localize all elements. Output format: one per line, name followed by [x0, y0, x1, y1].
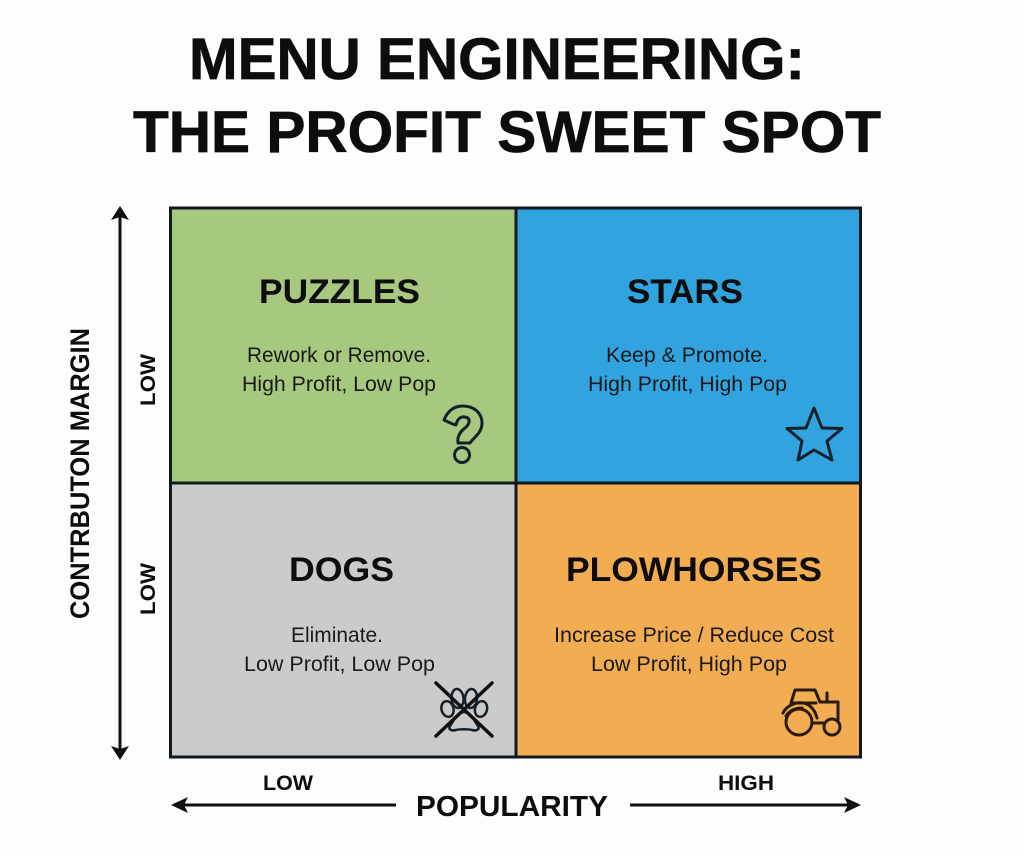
icon: tractor	[783, 690, 840, 735]
text: dogs description	[244, 624, 435, 676]
text: plowhorses description: Low Profit, High Pop	[591, 653, 787, 676]
panel: dogs	[170, 483, 516, 757]
arrow: popularity left	[171, 797, 396, 813]
heading: plowhorses: PLOWHORSES	[566, 551, 822, 589]
text: plowhorses description: Increase Price / Reduce Cost	[554, 624, 834, 647]
panel: plowhorses	[516, 483, 861, 757]
icon: question mark	[444, 406, 482, 462]
text: stars description: Keep & Promote.	[606, 344, 768, 367]
text: stars description	[588, 344, 787, 396]
icon: crossed-out paw	[436, 683, 492, 736]
arrow: popularity right	[630, 797, 861, 813]
axis title: contribution margin: CONTRBUTON MARGIN	[65, 328, 95, 619]
text: puzzles description: Rework or Remove.	[247, 344, 431, 367]
panel: stars	[516, 208, 861, 483]
axis label: upper low: LOW	[136, 353, 160, 406]
text: puzzles description	[242, 344, 436, 396]
axis label: popularity high: HIGH	[718, 771, 774, 795]
title: THE PROFIT SWEET SPOT	[133, 100, 881, 165]
text: puzzles description: High Profit, Low Pop	[242, 373, 436, 396]
title	[133, 27, 881, 165]
text: dogs description: Low Profit, Low Pop	[244, 653, 435, 676]
icon: star	[787, 408, 842, 460]
axis title: popularity: POPULARITY	[416, 791, 608, 823]
title: MENU ENGINEERING:	[189, 27, 805, 92]
heading: stars: STARS	[627, 273, 743, 311]
text: stars description: High Profit, High Pop	[588, 373, 787, 396]
text: dogs description: Eliminate.	[291, 624, 383, 647]
grid lines	[170, 208, 861, 757]
axis label: lower low: LOW	[136, 562, 160, 615]
axis label: popularity low: LOW	[263, 771, 314, 795]
heading: dogs: DOGS	[289, 551, 394, 589]
vertical arrow: contribution margin	[111, 206, 129, 760]
matrix grid	[170, 208, 861, 757]
panel: puzzles	[170, 208, 516, 483]
heading: puzzles: PUZZLES	[259, 273, 420, 311]
text: plowhorses description	[554, 624, 834, 676]
